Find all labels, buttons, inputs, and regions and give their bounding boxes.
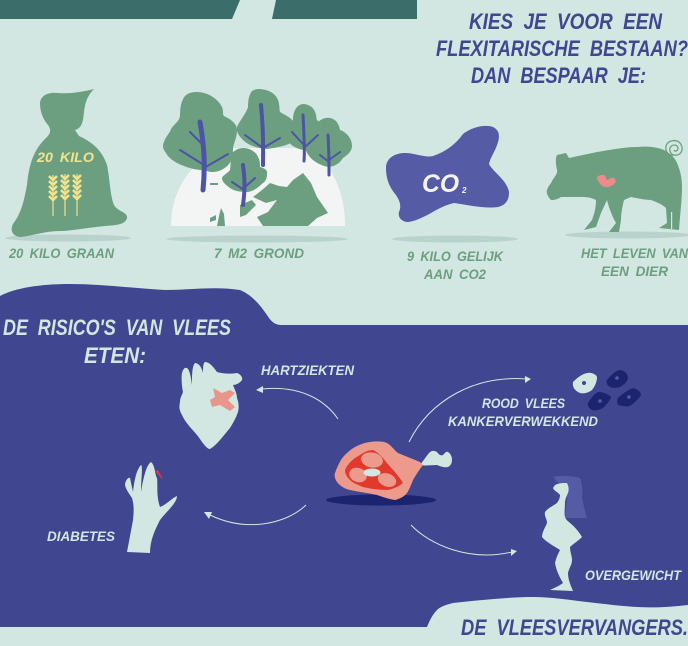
illustration: ham: [326, 441, 452, 506]
label: 7 m2 grond: 7 M2 GROND: [214, 245, 304, 261]
illustration: overweight figure: [542, 476, 587, 591]
label: hartziekten: HARTZIEKTEN: [261, 362, 355, 378]
heading: flexitarian: [436, 9, 688, 88]
label: rood vlees kankerverwekkend: ROOD VLEES: [482, 395, 566, 411]
icon: CO2 cloud: CO: [422, 170, 460, 198]
label: rood vlees kankerverwekkend: [448, 395, 598, 429]
arrow: to heart: [256, 386, 338, 419]
label: 9 kilo gelijk aan CO2: 9 KILO GELIJK: [407, 248, 504, 264]
label: diabetes: DIABETES: [47, 528, 116, 544]
icon: pig: [547, 141, 688, 238]
icon: CO2 cloud: [386, 126, 518, 242]
icon: grain sack: [5, 89, 131, 242]
label: rood vlees kankerverwekkend: KANKERVERWEKKEND: [448, 413, 598, 429]
tree trunks: [180, 105, 340, 205]
icon: curly tail: [666, 141, 682, 155]
label: 20 kilo graan: 20 KILO GRAAN: [8, 245, 115, 261]
heading: risks of meat: DE RISICO'S VAN VLEES: [3, 315, 231, 340]
heading: risks of meat: [3, 315, 231, 368]
map of Europe: [253, 173, 328, 226]
icon: CO2 cloud: 2: [461, 186, 467, 195]
icon: wheat: [49, 174, 81, 216]
arrow: to hand: [204, 505, 306, 525]
ham bone: [420, 451, 452, 467]
label: 9 kilo gelijk aan CO2: AAN CO2: [423, 266, 486, 282]
icon: cancer cells: [573, 370, 641, 410]
heading: flexitarian: KIES JE VOOR EEN: [469, 9, 663, 34]
label: overgewicht: OVERGEWICHT: [585, 567, 682, 583]
globe: [171, 148, 345, 226]
panel: risks of meat: [0, 284, 688, 627]
icon: hand with blood drop: [125, 462, 177, 553]
heading: flexitarian: DAN BESPAAR JE:: [471, 63, 646, 88]
icon: heart with plaster: [179, 362, 242, 449]
label: het leven van een dier: [581, 245, 688, 279]
top banner fragment: [0, 0, 417, 19]
label: 9 kilo gelijk aan CO2: [407, 248, 504, 282]
icon: grain sack: 20 KILO: [36, 149, 94, 165]
illustration: trees over Europe map: [163, 89, 352, 242]
arrow: to cancer cells: [409, 376, 531, 442]
label: het leven van een dier: EEN DIER: [601, 263, 669, 279]
heading: risks of meat: ETEN:: [84, 343, 146, 368]
ham meat: [335, 441, 423, 500]
arrow: to overweight figure: [411, 525, 517, 556]
